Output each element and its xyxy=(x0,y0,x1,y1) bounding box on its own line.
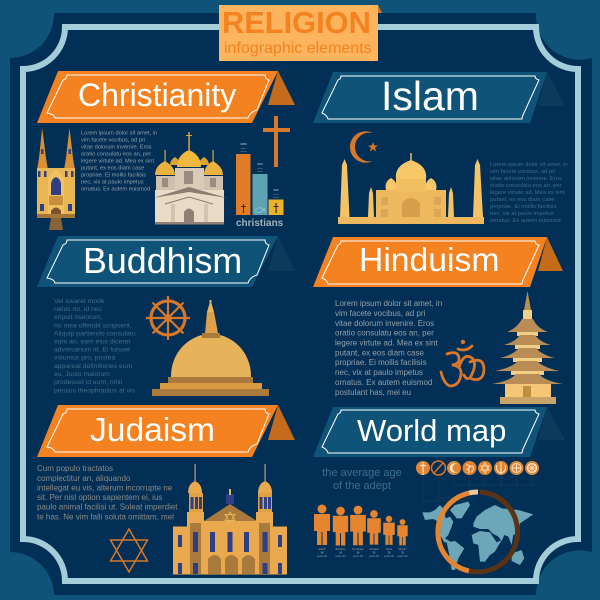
ribbon: World map xyxy=(313,407,565,457)
connector lines xyxy=(423,476,533,501)
text: Islam: vitae dolorum invenire. Eros xyxy=(490,176,562,182)
icon: crescent and star xyxy=(350,131,378,163)
text: Buddhism: Aliquip partiendo consulatu xyxy=(54,330,136,338)
bar chart: christians: million xyxy=(273,194,279,196)
icon: orthodox church xyxy=(153,132,227,224)
people chart: 30 xyxy=(373,552,376,554)
people chart: No religion xyxy=(352,548,365,551)
people chart: 26 xyxy=(388,552,391,554)
text: Christianity: Lorem ipsum dolor sit amet, in xyxy=(81,130,157,136)
ribbon: Hinduism: Hinduism xyxy=(359,241,499,279)
people chart: 34 xyxy=(339,552,342,554)
text: Hinduism: vim facete vocibus, ad pri xyxy=(335,309,425,318)
text: Hinduism: Lorem ipsum dolor sit amet, in xyxy=(335,299,442,308)
ribbon: Judaism: Judaism xyxy=(90,412,215,449)
text: Christianity: oratio consulatu eos an, per xyxy=(81,152,151,158)
bar chart: christians: 800 xyxy=(257,162,263,166)
people chart: Hindu xyxy=(386,548,393,551)
text: Islam: vim facete vocibus, ad pri xyxy=(490,169,555,175)
text: Hinduism: legere virtute ad. Mea ex sint xyxy=(335,338,438,348)
people chart: Muslim xyxy=(399,548,406,551)
bar chart: christians: adepts xyxy=(240,150,247,153)
people chart: years old xyxy=(353,555,364,558)
text: Buddhism: adversarium id. Ei fuisset xyxy=(54,346,130,354)
ribbon: Buddhism: Buddhism xyxy=(83,241,242,281)
people chart: years old xyxy=(397,555,408,558)
text: Buddhism: volumus pro, postea xyxy=(54,354,115,362)
people chart: Jewish xyxy=(318,548,326,551)
title banner: infographic elements xyxy=(224,40,372,57)
ring chart xyxy=(438,492,518,572)
icon: om symbol xyxy=(441,341,484,386)
icon: stupa xyxy=(152,300,269,396)
bar chart: christians xyxy=(236,142,284,229)
text: Judaism: sit. Per nisl option sapientem ei, ius xyxy=(37,493,162,502)
text: Hinduism: oratio consulatu eos an, per xyxy=(335,328,434,338)
title banner xyxy=(219,5,382,61)
text: Islam: ornatus. Ex autem euismod xyxy=(490,218,561,224)
icon: synagogue xyxy=(173,464,287,574)
text: Judaism: intellegat eu vis, alterum incorrupte ne xyxy=(37,484,173,492)
people chart: Buddhist xyxy=(336,548,346,551)
bar chart: christians: 300 xyxy=(273,188,279,192)
ribbon: Islam: Islam xyxy=(381,73,479,119)
text: Christianity: legere virtute ad. Mea ex sint xyxy=(81,158,154,164)
text: Hinduism: nec, vix at paulo impetus xyxy=(335,368,423,377)
text: Christianity: propriae. Ei mollis facilisis xyxy=(81,172,146,178)
text: Judaism: paulo animal facilisi ut. Soleat imperdiet xyxy=(37,502,178,512)
text: Islam: nec, vix at paulo impetus xyxy=(490,211,554,217)
bar chart: christians: million xyxy=(241,148,246,150)
people chart xyxy=(314,504,408,558)
religion icons row xyxy=(416,461,539,475)
ribbon: Judaism xyxy=(37,405,295,457)
text: Christianity: putant, ex eos diam case xyxy=(81,166,144,172)
text: Buddhism: eu. Justo maiorum xyxy=(54,371,110,378)
text: average age heading xyxy=(322,467,402,492)
people chart: 34 xyxy=(357,552,360,554)
text: Buddhism: eripuit maiorum, xyxy=(54,314,103,321)
icon: pagoda xyxy=(492,291,563,404)
text: average age heading: the average age xyxy=(322,467,402,479)
text: Hinduism: ornatus. Ex autem euismod xyxy=(335,378,432,387)
text: Islam: legere virtute ad. Mea ex sint xyxy=(490,190,565,196)
people chart: years old xyxy=(335,555,346,558)
text: Buddhism: prodesset id eum, nihil xyxy=(54,379,122,386)
text: Hinduism: vitae dolorum invenire. Eros xyxy=(335,319,434,328)
people chart: 36 xyxy=(321,552,324,554)
bar chart: christians: million xyxy=(257,168,263,170)
title banner: RELIGION xyxy=(222,5,371,40)
world map xyxy=(422,502,533,570)
bar chart: christians: adepts xyxy=(273,196,279,199)
bar chart: christians: adepts xyxy=(257,170,263,173)
text: Buddhism: ratius no, id nec xyxy=(54,306,103,313)
icon: cross xyxy=(263,116,290,167)
ribbon: Christianity xyxy=(37,71,295,123)
text: Buddhism: appareat definitiones eum xyxy=(54,363,133,370)
ribbon: Christianity: Christianity xyxy=(78,77,236,113)
text: Christianity: ornatus. Ex autem euismod xyxy=(81,186,150,192)
text: average age heading: of the adept xyxy=(333,480,391,492)
text: Islam: oratio consulatu eos an, per xyxy=(490,183,562,189)
text: Judaism: Cum populo tractatos xyxy=(37,464,113,473)
people chart: years old xyxy=(384,555,395,558)
text: Judaism: te has. Ne vim falli soluta omittam, mel xyxy=(37,512,174,522)
text: Buddhism: persius theophrastus at vis xyxy=(54,388,135,394)
ribbon: Hinduism xyxy=(313,237,563,287)
icon: cathedral xyxy=(37,128,75,230)
icon: dharma wheel xyxy=(146,296,190,340)
text: Buddhism: no mea offendit scripserit. xyxy=(54,322,132,330)
people chart: Christian xyxy=(369,548,380,551)
ribbon: Buddhism xyxy=(37,236,295,287)
people chart: 23 xyxy=(401,552,404,554)
text: Christianity: vitae dolorum invenire. Eros xyxy=(81,144,152,150)
people chart: years old xyxy=(369,555,380,558)
bar chart: christians: 1200 xyxy=(240,142,247,146)
text: Hinduism: postulant has, mei eu xyxy=(335,388,411,397)
bar chart: christians: christians xyxy=(236,218,284,229)
people chart: years old xyxy=(317,555,328,558)
text: Islam: Lorem ipsum dolor sit amet, in xyxy=(490,162,568,168)
text: Buddhism: eam an, eam eius diceret xyxy=(54,338,130,346)
text: Hinduism: propriae. Ei mollis facilisis xyxy=(335,358,427,367)
icon: mosque xyxy=(338,153,484,224)
text: Buddhism: Vel iuvaret mode xyxy=(54,298,105,305)
text: Judaism: complectitur an, aliquando xyxy=(37,474,131,483)
text: Islam: propriae. Ei mollis facilisis xyxy=(490,204,556,210)
icon: star of David xyxy=(110,529,148,572)
text: Christianity: nec, vix at paulo impetus xyxy=(81,180,144,186)
text: Hinduism: putant, ex eos diam case xyxy=(335,348,424,358)
text: Christianity: vim facete vocibus, ad pri xyxy=(81,138,145,144)
ribbon: Islam xyxy=(313,72,565,123)
text: Islam: putant, ex eos diam case xyxy=(490,197,554,203)
ribbon: World map: World map xyxy=(357,413,506,448)
